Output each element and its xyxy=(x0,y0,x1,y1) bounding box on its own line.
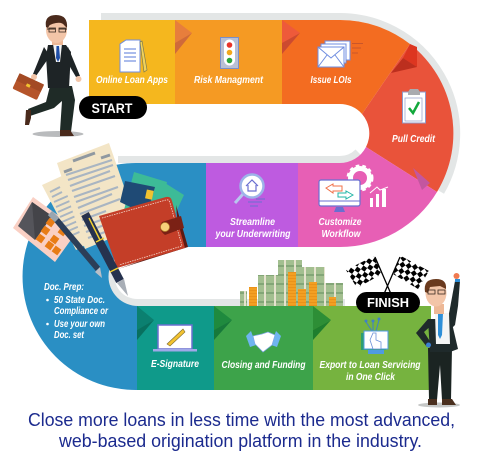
label: streamline your underwriting: your Underwriting xyxy=(215,229,290,240)
panel: doc prep xyxy=(23,163,206,390)
shadow xyxy=(418,402,460,408)
label: online loan apps: Online Loan Apps xyxy=(96,75,168,86)
icon: clipboard xyxy=(402,89,426,123)
text: doc prep list: Doc. Prep: xyxy=(44,282,84,293)
illustration: paper documents xyxy=(42,143,138,250)
text: doc prep list: Use your own xyxy=(54,319,105,330)
panel: pull credit xyxy=(362,44,453,192)
panel: risk management xyxy=(175,20,282,104)
head xyxy=(425,279,446,314)
shirt and tie xyxy=(435,313,450,344)
road outer edge xyxy=(101,16,457,303)
text: doc prep list: 50 State Doc. xyxy=(54,295,105,306)
panel: e-signature xyxy=(137,306,214,390)
illustration: pencil xyxy=(50,213,102,278)
left arm xyxy=(416,319,433,347)
illustration: checkered flags xyxy=(346,256,429,294)
illustration: cash and card xyxy=(120,172,184,225)
badge: start: START xyxy=(92,101,133,116)
icon: application document xyxy=(120,40,147,72)
label: issue LOIs: Issue LOIs xyxy=(310,75,352,86)
badge: finish: FINISH xyxy=(367,296,409,310)
arrow marker xyxy=(391,44,417,73)
label: customize workflow: Customize xyxy=(318,217,362,228)
label: export to loan servicing: Export to Loan Servicing xyxy=(320,360,420,371)
arrow marker xyxy=(214,306,232,340)
hand xyxy=(426,342,431,348)
label: e-signature: E-Signature xyxy=(151,359,199,370)
panel: streamline underwriting xyxy=(188,163,298,247)
badge: start xyxy=(79,96,147,119)
illustration: money stacks xyxy=(240,260,343,306)
arrow marker xyxy=(313,306,331,340)
text: doc prep list: Doc. set xyxy=(54,330,85,341)
briefcase xyxy=(12,73,44,100)
arrow marker xyxy=(188,163,206,197)
character: businessman celebrating xyxy=(416,273,460,408)
legs xyxy=(428,348,456,405)
tagline: Close more loans in less time with the most advanced, xyxy=(28,410,455,430)
tagline xyxy=(28,410,455,451)
shirt and tie xyxy=(53,44,62,62)
arms xyxy=(31,47,82,82)
arrow marker: red edge xyxy=(413,168,430,190)
icon: laptop with pen xyxy=(153,325,197,352)
icon: monitor with arrows xyxy=(319,180,360,212)
arrow marker xyxy=(175,20,192,54)
icon: magnifier over house xyxy=(235,174,265,206)
badge: finish xyxy=(356,292,420,313)
label: pull credit: Pull Credit xyxy=(392,134,436,145)
arrow marker xyxy=(282,20,300,54)
legs xyxy=(25,86,75,136)
raised arm xyxy=(448,273,460,330)
icon: traffic light xyxy=(220,38,238,68)
panel: export to loan servicing xyxy=(313,306,431,390)
panel: customize workflow xyxy=(280,147,437,247)
icon: gear xyxy=(348,166,372,190)
label: customize workflow: Workflow xyxy=(322,229,362,240)
panel: issue LOIs xyxy=(282,20,410,114)
head xyxy=(46,15,67,45)
text: doc prep list xyxy=(44,282,109,341)
panel: online loan apps xyxy=(89,20,175,104)
arrow marker xyxy=(280,163,298,197)
icon: handshake xyxy=(246,331,281,352)
label: export to loan servicing: in One Click xyxy=(346,372,395,383)
tagline: web-based origination platform in the industry. xyxy=(58,431,422,451)
character: businessman running with briefcase xyxy=(12,15,83,137)
text: doc prep list: Compliance or xyxy=(54,306,109,317)
icon: envelopes xyxy=(318,41,363,67)
torso xyxy=(46,45,71,88)
illustration: calculator xyxy=(13,197,78,262)
arrow marker xyxy=(137,306,154,340)
label: closing and funding: Closing and Funding xyxy=(222,360,306,371)
label: streamline your underwriting: Streamline xyxy=(230,217,275,228)
illustration: red wallet xyxy=(99,197,188,269)
label: risk managment: Risk Managment xyxy=(194,75,264,86)
illustration: fountain pen xyxy=(85,214,128,296)
icon: growth chart xyxy=(370,187,388,207)
torso xyxy=(428,319,458,352)
shadow xyxy=(32,131,84,137)
icon: touch export xyxy=(361,318,388,354)
panel: closing and funding xyxy=(214,306,313,390)
